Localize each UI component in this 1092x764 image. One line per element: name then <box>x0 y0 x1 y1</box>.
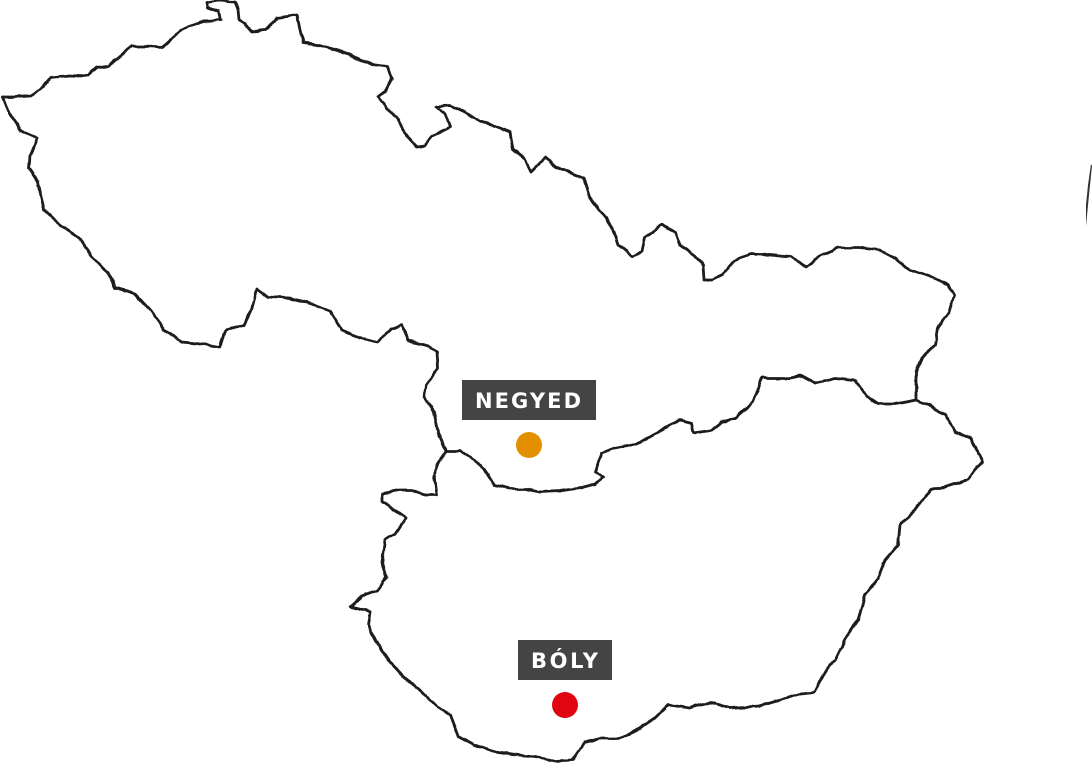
outline fragment: right edge <box>1086 164 1092 226</box>
outline: southern region <box>350 400 983 761</box>
label: Bóly <box>518 640 612 680</box>
marker: Bóly <box>552 692 578 718</box>
outline: northern region <box>3 1 954 400</box>
outline: shared border <box>446 375 916 492</box>
label: Negyed: NEGYED <box>475 389 581 413</box>
label: Negyed <box>462 380 596 420</box>
label: Bóly: BÓLY <box>531 648 599 673</box>
marker: Negyed <box>516 432 542 458</box>
outline: western and southern edge of northern region <box>3 97 446 451</box>
